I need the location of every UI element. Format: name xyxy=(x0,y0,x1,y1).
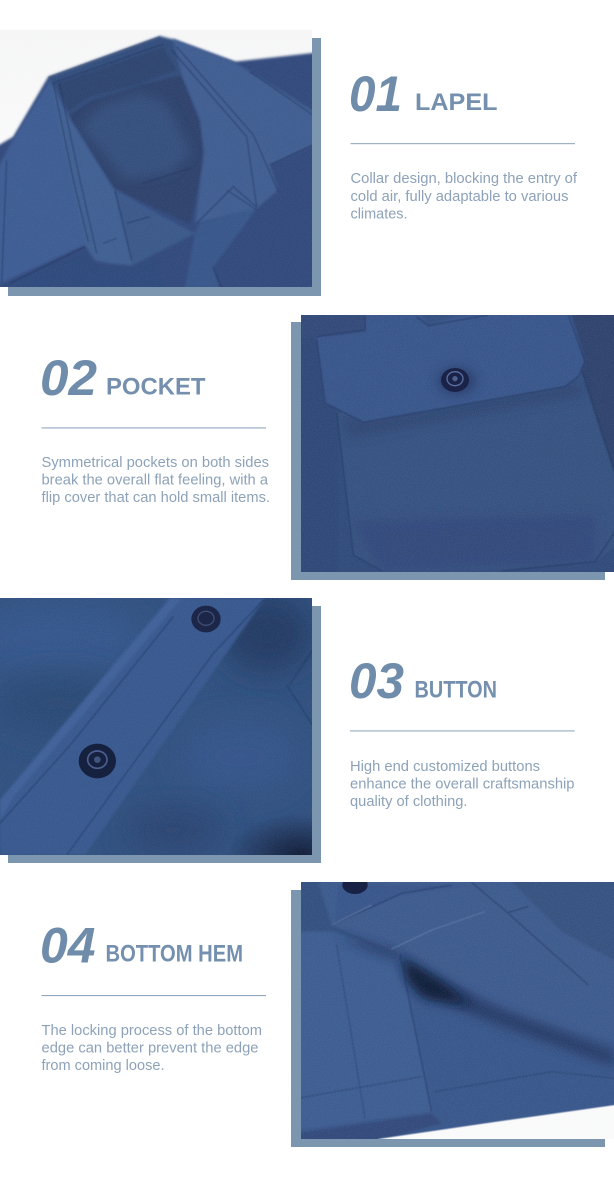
text: button description: enhance the overall craftsmanship xyxy=(350,776,574,792)
photo: shirt buttons xyxy=(0,598,312,855)
panel: lapel xyxy=(0,30,333,307)
photo: shirt bottom hem xyxy=(301,882,614,1139)
heading: 04 bottom hem xyxy=(40,918,243,974)
text: bottom hem description: The locking process of the bottom xyxy=(42,1023,262,1039)
text: button description: High end customized buttons xyxy=(350,759,540,775)
offset frame xyxy=(291,322,605,580)
text: bottom hem description: from coming loose. xyxy=(42,1058,164,1074)
icon: partial button xyxy=(342,876,368,894)
text: button description xyxy=(350,759,574,810)
text: pocket description xyxy=(42,455,270,506)
number 02: 02 xyxy=(40,350,97,406)
title button: BUTTON xyxy=(414,677,497,704)
title pocket: POCKET xyxy=(106,373,206,400)
text: lapel description: climates. xyxy=(350,206,408,222)
number 01: 01 xyxy=(349,66,402,122)
icon: pocket button xyxy=(437,368,476,394)
icon: upper button xyxy=(191,606,221,632)
number 03: 03 xyxy=(349,653,404,709)
text: lapel description xyxy=(350,171,578,222)
number 04: 04 xyxy=(40,918,96,974)
title bottom hem: BOTTOM HEM xyxy=(106,941,243,968)
icon: lower button xyxy=(79,744,116,778)
text: lapel description: Collar design, blocking the entry of xyxy=(350,171,578,187)
offset frame xyxy=(291,890,605,1147)
text: button description: quality of clothing. xyxy=(350,794,468,810)
text: bottom hem description xyxy=(42,1023,262,1074)
text: pocket description: break the overall flat feeling, with a xyxy=(42,472,269,488)
heading: 02 pocket xyxy=(40,350,206,406)
heading: 01 lapel xyxy=(349,66,498,122)
text: bottom hem description: edge can better prevent the edge xyxy=(42,1041,258,1057)
text: pocket description: Symmetrical pockets on both sides xyxy=(42,455,269,471)
photo: shirt pocket xyxy=(301,315,614,572)
panel: button xyxy=(0,593,373,897)
title lapel: LAPEL xyxy=(415,89,498,116)
text: lapel description: cold air, fully adaptable to various xyxy=(350,189,568,205)
offset frame xyxy=(8,606,321,863)
text: pocket description: flip cover that can hold small items. xyxy=(42,490,270,506)
offset frame xyxy=(8,38,321,296)
panel: bottom hem xyxy=(285,875,614,1147)
heading: 03 button xyxy=(349,653,497,709)
panel: pocket xyxy=(285,305,614,592)
photo: shirt collar xyxy=(0,30,312,287)
